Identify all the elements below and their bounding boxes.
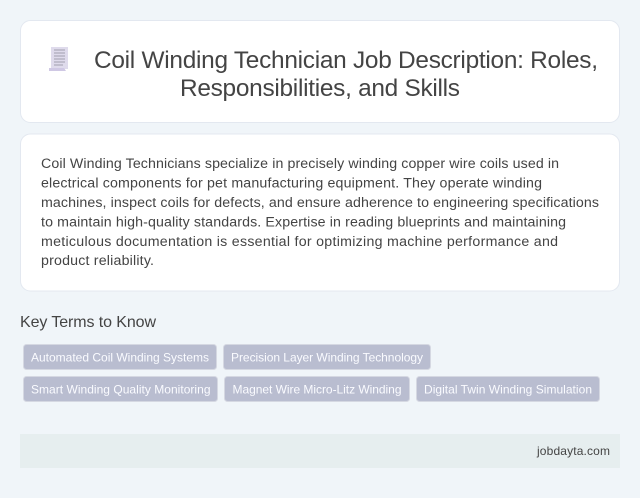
icon: document [49,47,68,71]
tag: magnet wire micro-litz winding [224,376,410,402]
heading: key terms: Key Terms to Know [20,314,156,331]
title [94,47,598,102]
text block: description: meticulous documentation is essential for optimizing machine performance and [41,234,558,250]
text block: description: product reliability. [41,253,154,269]
text block: description: to maintain high-quality standards. Expertise in reading blueprints and maintaining [41,214,566,230]
footer: jobdayta.com [536,444,610,458]
text block: description: electrical components for pet manufacturing equipment. They operate winding [41,176,542,192]
tag: precision layer winding technology [224,344,430,370]
tag: smart winding quality monitoring [24,376,218,402]
tag: magnet wire micro-litz winding: Magnet Wire Micro-Litz Winding [232,382,402,396]
tag: precision layer winding technology: Precision Layer Winding Technology [231,350,423,364]
text block: description: Coil Winding Technicians specialize in precisely winding copper wire coils used in [41,156,559,172]
tag: digital twin winding simulation [416,376,600,402]
title: Responsibilities, and Skills [180,75,460,102]
tag: digital twin winding simulation: Digital Twin Winding Simulation [424,382,592,396]
tag: smart winding quality monitoring: Smart Winding Quality Monitoring [31,382,210,396]
tag: automated coil winding systems: Automated Coil Winding Systems [31,350,209,364]
footer [20,434,620,468]
tag: automated coil winding systems [24,344,216,370]
text block: description [41,156,599,269]
panel: description [20,134,620,291]
text block: description: machines, inspect coils for defects, and ensure adherence to engineering specifications [41,195,599,211]
title: Coil Winding Technician Job Description: Roles, [94,47,598,74]
panel: header [20,20,620,122]
